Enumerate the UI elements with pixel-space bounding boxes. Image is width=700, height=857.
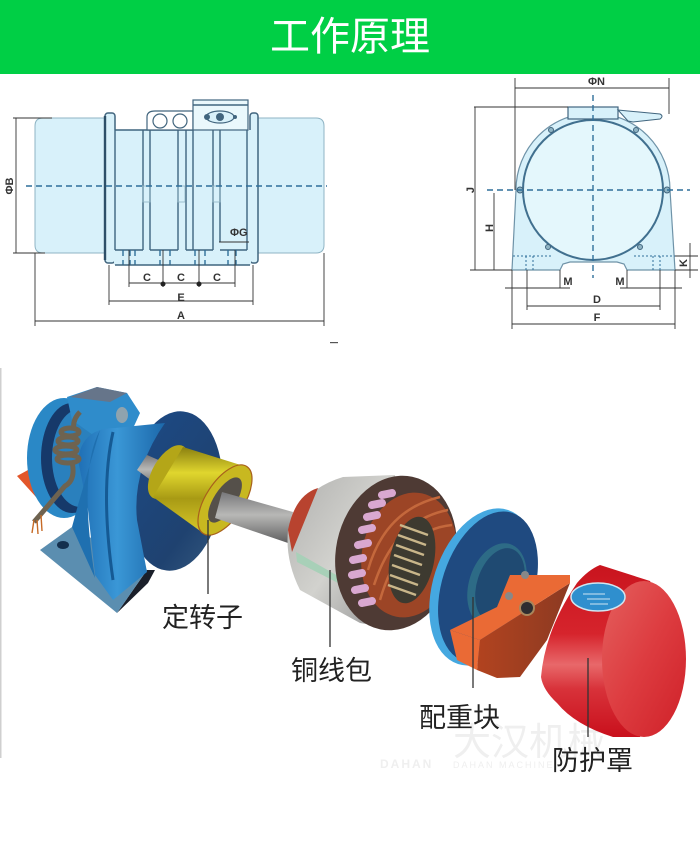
front-view dimension drawing bbox=[465, 76, 698, 329]
dimension dots bbox=[160, 282, 202, 286]
dimension labels: H bbox=[484, 224, 496, 232]
dimension labels: C bbox=[177, 272, 185, 284]
centre lines bbox=[487, 95, 690, 278]
dimension lines bbox=[13, 118, 324, 326]
pointer lines bbox=[330, 570, 588, 737]
dimension labels: C bbox=[213, 272, 221, 284]
motor side outline bbox=[35, 113, 324, 265]
dimension labels bbox=[465, 76, 690, 324]
side-view dimension drawing bbox=[4, 100, 327, 326]
dimension labels: ΦB bbox=[4, 177, 16, 194]
watermark: DAHAN MACHINE bbox=[453, 760, 555, 770]
watermark bbox=[380, 722, 605, 771]
shaft bbox=[137, 455, 170, 487]
top terminal box bbox=[568, 107, 662, 122]
title banner: 工作原理 bbox=[270, 15, 430, 59]
dimension labels: C bbox=[143, 272, 151, 284]
dimension labels: A bbox=[177, 310, 185, 322]
red protective cover bbox=[541, 565, 686, 737]
left edge rule bbox=[0, 368, 2, 758]
exploded motor photo bbox=[0, 368, 686, 776]
stator bbox=[288, 464, 471, 642]
dimension labels: ΦN bbox=[588, 76, 605, 88]
bolts bbox=[517, 128, 670, 250]
dimension labels: M bbox=[615, 276, 625, 288]
rotor bbox=[140, 439, 293, 544]
label: rotor: 定转子 bbox=[162, 603, 243, 633]
watermark: DAHAN bbox=[380, 757, 433, 771]
dimension labels: D bbox=[593, 294, 601, 306]
dimension labels bbox=[4, 177, 248, 322]
label: copper winding: 铜线包 bbox=[291, 656, 372, 686]
dimension labels: M bbox=[563, 276, 573, 288]
assembled motor housing bbox=[17, 387, 165, 613]
pointer: counterweight bbox=[472, 597, 474, 688]
stray dash mark bbox=[330, 342, 338, 343]
centre line bbox=[26, 185, 327, 187]
watermark: 大汉机械 bbox=[453, 722, 605, 764]
counterweight disc and block bbox=[410, 495, 570, 679]
coiled cable bbox=[34, 412, 80, 522]
pointer: rotor bbox=[207, 520, 209, 594]
dimension labels: J bbox=[465, 187, 477, 193]
title banner bbox=[0, 0, 700, 74]
big navy disc bbox=[120, 407, 230, 575]
housing outline bbox=[512, 113, 675, 270]
dimension labels: E bbox=[177, 292, 185, 304]
dimension labels: F bbox=[594, 312, 601, 324]
cover label sticker bbox=[571, 583, 625, 611]
dimension labels: ΦG bbox=[230, 227, 248, 239]
dimension labels: K bbox=[678, 259, 690, 267]
label: counterweight: 配重块 bbox=[419, 703, 500, 733]
terminal box and eyelets bbox=[147, 100, 248, 130]
label: protective cover: 防护罩 bbox=[552, 746, 633, 776]
dimension lines bbox=[470, 78, 698, 329]
motor bore circle bbox=[523, 120, 663, 260]
